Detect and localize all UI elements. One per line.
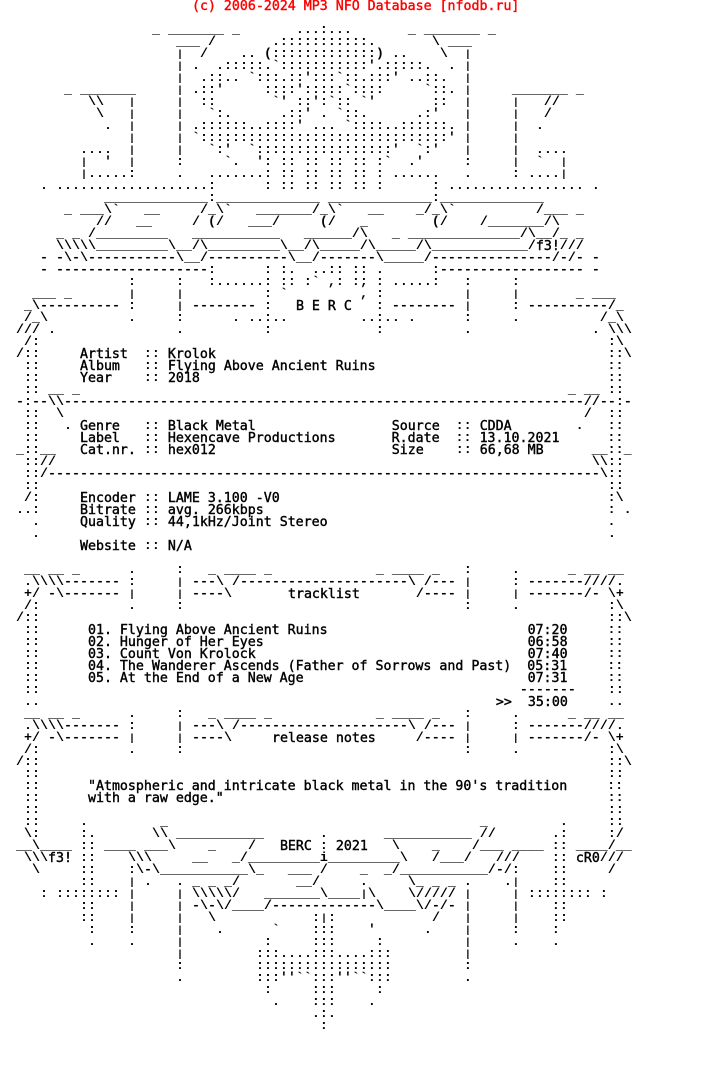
ascii art: footer with BERC 2021 credit and emblem: | [177,926,183,937]
heading: release notes: __ __ _ . : _ ____ _ _ ____ _ : . _ __ __ .\\\\------- : ---\ /---------------------\ /--- : -------////. +/ -\------- ----\ release notes /---- -------/- \+ /: . : : . :\ /:: ::\ :: :: [0,707,632,782]
ascii art: castle logo and BERC banner: | [561,170,567,181]
ascii art: castle logo and BERC banner: | [465,50,471,61]
ascii art: footer with BERC 2021 credit and emblem: | [177,950,183,961]
ascii art: footer with BERC 2021 credit and emblem: | [465,914,471,925]
heading: tracklist: | [177,578,183,589]
ascii art: castle logo and BERC banner: | [465,74,471,85]
ascii art: footer with BERC 2021 credit and emblem: :: . _ _ . :: \: :. \\ ___________ . ___________ // .: :/ __\____ :: ____ ___\ _ / BERC : 2021 \ _ /___ ____ :: ____/__ \\\f3! :: \\\ __ _/_________i_________\ /___/ /// :: cR0/// \ :: :\-\___________\_ ___ / _ _/___________/-/: :: / :: . . _ _ _/ __/ . \_ _ _ . . :: : :::::::: \\\\\/ _______\____ \ \///// :::::::: : :: -\-\/____/-------------\____\/-/- :: :: \ : : / :: : : . ` ::: ' . : : . . : ::: : . . :::....:::....::: : ::::::::::::::::: : . :::''``:::''``::: . : ::: : . ::: . .:. : [0,815,632,1034]
ascii art: castle logo and BERC banner: | [177,134,183,145]
heading: tracklist: __ __ _ . : _ ____ _ _ ____ _ : . _ __ __ .\\\\------- : ---\ /---------------------\ /--- : -------////. +/ -\------- ----\ tracklist /---- -------/- \+ /: . : : . :\ /:: ::\ [0,563,632,626]
ascii art: castle logo and BERC banner: | [513,158,519,169]
heading: release notes: | [513,734,519,745]
ascii art: castle logo and BERC banner: | [465,290,471,301]
ascii art: castle logo and BERC banner: | [177,122,183,133]
ascii art: castle logo and BERC banner: | [129,98,135,109]
heading: release notes: | [465,722,471,733]
ascii art: castle logo and BERC banner: | [465,86,471,97]
ascii art: castle logo and BERC banner: | [177,86,183,97]
ascii art: footer with BERC 2021 credit and emblem: | [177,890,183,901]
ascii art: footer with BERC 2021 credit and emblem: | [465,890,471,901]
ascii art: castle logo and BERC banner: | [513,146,519,157]
ascii art: footer with BERC 2021 credit and emblem: | [513,878,519,889]
ascii art: footer with BERC 2021 credit and emblem: | [465,950,471,961]
ascii art: footer with BERC 2021 credit and emblem: | [361,890,367,901]
ascii art: castle logo and BERC banner: | [465,146,471,157]
heading: tracklist: | [513,590,519,601]
ascii art: castle logo and BERC banner: | [465,134,471,145]
ascii art: castle logo and BERC banner: | [465,302,471,313]
ascii art: castle logo and BERC banner: | [561,158,567,169]
ascii art: castle logo and BERC banner: | [465,62,471,73]
ascii art: footer with BERC 2021 credit and emblem: | [513,914,519,925]
heading: tracklist: | [177,590,183,601]
ascii art: castle logo and BERC banner: | [81,158,87,169]
panel: release info: /:: Artist :: Krolok ::\ :: Album :: Flying Above Ancient Ruins :: :: Year :: 2018 :: :: __ _ _ __ :: -:--\\-----------------------------------------------------------------//--:- :: \ / :: :: . Genre :: Black Metal Source :: CDDA . :: :: Label :: Hexencave Productions R.date :: 13.10.2021 :: _::__ Cat.nr. :: hex012 Size :: 66,68 MB __::_ ::// \\:: ::/---------------------------------------------------------------------\:: :: :: /: Encoder :: LAME 3.100 -V0 :\ ..: Bitrate :: avg. 266kbps : . . Quality :: 44,1kHz/Joint Stereo . . . Website :: N/A [0,347,632,554]
ascii art: castle logo and BERC banner: | [177,98,183,109]
ascii art: castle logo and BERC banner: | [465,98,471,109]
ascii art: castle logo and BERC banner: | [513,290,519,301]
ascii art: footer with BERC 2021 credit and emblem: | [177,938,183,949]
ascii art: castle logo and BERC banner: | [129,290,135,301]
ascii art: castle logo and BERC banner: | [513,134,519,145]
ascii art: footer with BERC 2021 credit and emblem: | [465,902,471,913]
text block: release notes quote: :: "Atmospheric and intricate black metal in the 90's tradition :: :: with a raw edge." :: :: :: [0,779,624,818]
ascii art: footer with BERC 2021 credit and emblem: | [129,914,135,925]
ascii art: footer with BERC 2021 credit and emblem: | [321,914,327,925]
ascii art: castle logo and BERC banner: | [129,146,135,157]
ascii art: footer with BERC 2021 credit and emblem: | [465,926,471,937]
ascii art: footer with BERC 2021 credit and emblem: | [465,938,471,949]
ascii art: castle logo and BERC banner: | [177,110,183,121]
heading: release notes: | [177,734,183,745]
ascii art: footer with BERC 2021 credit and emblem: | [129,878,135,889]
ascii art: footer with BERC 2021 credit and emblem: | [513,902,519,913]
heading: tracklist: | [465,578,471,589]
ascii art: castle logo and BERC banner: | [129,134,135,145]
ascii art: footer with BERC 2021 credit and emblem: | [177,902,183,913]
heading: release notes: | [129,734,135,745]
ascii art: footer with BERC 2021 credit and emblem: | [129,890,135,901]
ascii art: castle logo and BERC banner: | [177,146,183,157]
ascii art: castle logo and BERC banner: | [465,122,471,133]
heading: release notes: | [177,722,183,733]
ascii art: castle logo and BERC banner: | [81,170,87,181]
panel: tracklist: :: 01. Flying Above Ancient Ruins 07:20 :: :: 02. Hunger of Her Eyes 06:58 :: :: 03. Count Von Krolock 07:40 :: :: 04. The Wanderer Ascends (Father of Sorrows and Past) 05:31 :: :: 05. At the End of a New Age 07:31 :: :: ------- :: .. >> 35:00 .. [0,623,624,710]
heading: release notes: | [465,734,471,745]
heading: tracklist: | [465,590,471,601]
ascii art: castle logo and BERC banner: _ _______ _ ...:... _ _______ _ ___ / .:::::::::::. \ ___ / .. (:::::::::::::) .. \ . .:::::.`:::::::::::'.:::::. . .::.. `:::.::':::`::.:::' ..::. _ _______ .::' ::::':::::`:::: `::. _______ _ \\ :: `' ::':`:: `' :: // \ `:. .::' . `::. .:' / . .::::::..::::' ... `::::..::::::. . `:::::::::::::::::::::::::::::::' .... `:' `:::::::::::::::::' `:' .... ' : `. ': :: :: :: :: :` .' : ` .....: . .......: :: :: :: :: : ...... . : .... . ...................: : :: :: :: :: : : ................. . _____________:_____________ _____________:_____________ _ ___\` __ /_\` _______/_\` __ _/_\` /___ _ // __ / (/ ___/ (/ _ (/ /_______/\ _ _ /_________ ___________ ______/\ _ ______________/\__/_ _ \\\\\_________\__/\_________\__/\_____/\_____/\____________/f3!/// - -\-\-----------\__/----------\__/-------\_____/---------------/-/- - - -------------------: : :. ..:: :: . :------------------ - : : :......: :: :` ,: :; : .....: : : ___ _ : ` , : _ ___ _\---------- : -------- : B E R C : -------- : ----------/_ /_\ . : . ..:.. ..:.. . : . /_\ /// . . : : . . \\\ /: :\ [0,23,632,350]
ascii art: castle logo and BERC banner: | [129,122,135,133]
ascii art: castle logo and BERC banner: | [513,122,519,133]
ascii art: castle logo and BERC banner: | [177,74,183,85]
heading: tracklist: | [129,590,135,601]
ascii art: castle logo and BERC banner: | [177,302,183,313]
ascii art: castle logo and BERC banner: | [129,158,135,169]
ascii art: footer with BERC 2021 credit and emblem: | [177,914,183,925]
ascii art: footer with BERC 2021 credit and emblem: | [513,890,519,901]
ascii art: castle logo and BERC banner: | [513,98,519,109]
ascii art: castle logo and BERC banner: | [129,110,135,121]
ascii art: castle logo and BERC banner: | [177,50,183,61]
ascii art: castle logo and BERC banner: | [513,110,519,121]
ascii art: castle logo and BERC banner: | [177,62,183,73]
ascii art: castle logo and BERC banner: | [465,110,471,121]
ascii art: footer with BERC 2021 credit and emblem: | [129,902,135,913]
ascii art: castle logo and BERC banner: | [177,290,183,301]
